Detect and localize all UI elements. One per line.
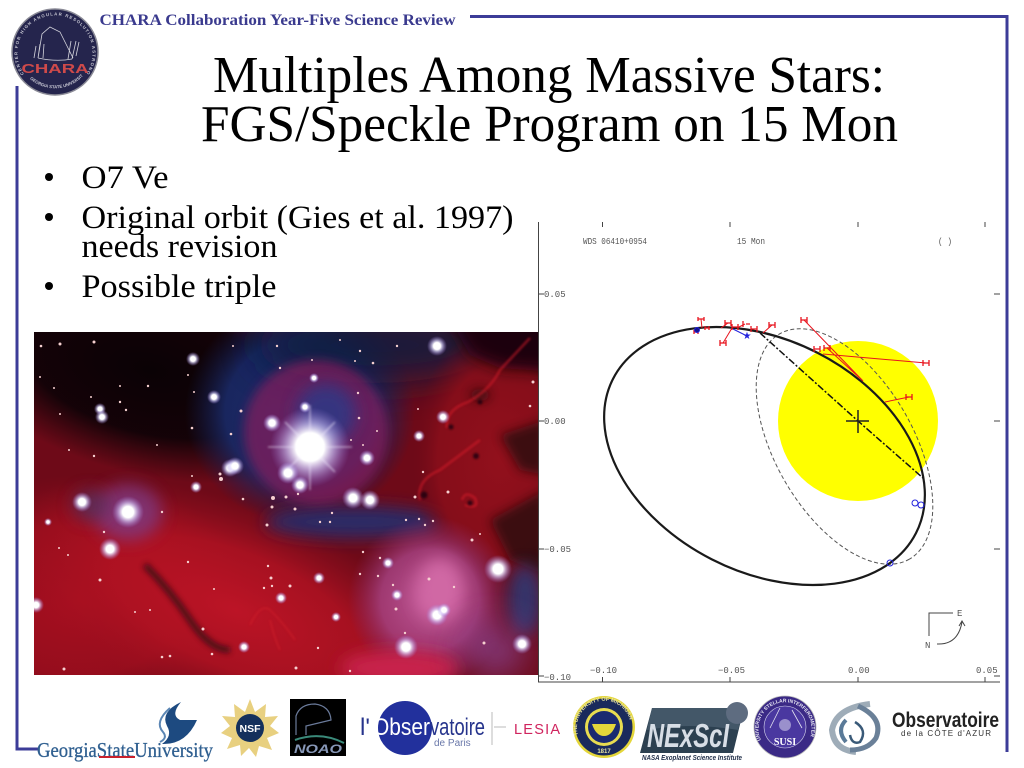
logo: swirl (832, 704, 878, 752)
logo: LESIA: LESIA (514, 722, 560, 738)
bullet list: O7 Ve (82, 160, 168, 196)
axis labels: 0.00 (544, 417, 566, 427)
logo: Observatoire de Paris: de Paris (434, 738, 471, 749)
logo: SUSI: UNIVERSITY STELLAR INTERFEROMETER (755, 698, 815, 742)
logo: NSF (221, 699, 279, 757)
logo: NSF: NSF (240, 723, 261, 735)
header: collaboration name: CHARA Collaboration Year-Five Science Review (100, 12, 456, 29)
logo: Observatoire de la Cote d'Azur: Observatoire (892, 709, 999, 732)
plot header text: ( ) (938, 237, 952, 247)
logo: Observatoire de Paris: l' (360, 714, 370, 741)
bullet list: Possible triple (82, 269, 276, 305)
dashed orbit (720, 299, 969, 594)
axis labels: −0.10 (544, 673, 571, 683)
logo: SUSI (754, 696, 816, 758)
logo: NOAO: NOAO (294, 742, 343, 756)
yellow disk (778, 341, 938, 501)
line of nodes (760, 333, 923, 478)
axis labels (544, 290, 998, 683)
title (201, 47, 898, 153)
chart panel: orbit plot of 15 Mon (538, 220, 1003, 684)
logo: Observatoire de Paris: vatoire (430, 714, 485, 741)
orientation compass (925, 609, 965, 651)
main star (268, 405, 352, 490)
logo: Observatoire de Paris (360, 701, 485, 755)
logo: University of Michigan: THE UNIVERSITY OF MICHIGAN (573, 696, 634, 736)
axis labels: −0.05 (718, 666, 745, 676)
logo: CHARA seal: CHARA (22, 61, 89, 76)
plot header text: WDS 06410+0954 (583, 237, 647, 247)
logo: NExScI: NASA Exoplanet Science Institute (642, 755, 742, 762)
axis labels: −0.05 (544, 545, 571, 555)
logo: NOAO (290, 699, 346, 756)
orientation compass: E (957, 609, 962, 619)
plot header text: 15 Mon (737, 237, 765, 247)
plot header text (583, 237, 952, 247)
blue measurements (694, 328, 924, 566)
axis labels: −0.10 (590, 666, 617, 676)
solid orbit (560, 275, 969, 637)
axis labels: 0.00 (848, 666, 870, 676)
title: FGS/Speckle Program on 15 Mon (201, 96, 898, 153)
origin cross (846, 410, 869, 433)
bullet list (45, 160, 514, 305)
logo: NExScI (640, 702, 748, 762)
blue measurements: ★ (743, 331, 752, 342)
logo: LESIA (492, 712, 560, 745)
logo: Observatoire de la Cote d'Azur: de la CÔTE d'AZUR (901, 729, 991, 738)
logo: SUSI: SUSI (774, 737, 796, 748)
orientation compass: N (925, 641, 930, 651)
axes and ticks (538, 222, 1000, 682)
axis labels: 0.05 (544, 290, 566, 300)
logo: University of Michigan (573, 696, 635, 758)
logo: Georgia State University (37, 702, 213, 762)
bullet list: Original orbit (Gies et al. 1997) (82, 200, 514, 236)
bullet list: needs revision (82, 229, 278, 265)
logo: CHARA seal (11, 8, 99, 96)
logo: Georgia State University: GeorgiaStateUniversity (37, 738, 213, 762)
title: Multiples Among Massive Stars: (213, 47, 885, 104)
logo: Observatoire de la Cote d'Azur (892, 709, 999, 738)
logo: University of Michigan: 1817 (597, 749, 611, 755)
red measurements (694, 317, 929, 402)
logo: NExScI: NExScI (647, 717, 730, 754)
photo: star cluster and nebula (34, 332, 538, 675)
logo: Observatoire de Paris: Obser (373, 714, 430, 741)
axis labels: 0.05 (976, 666, 998, 676)
